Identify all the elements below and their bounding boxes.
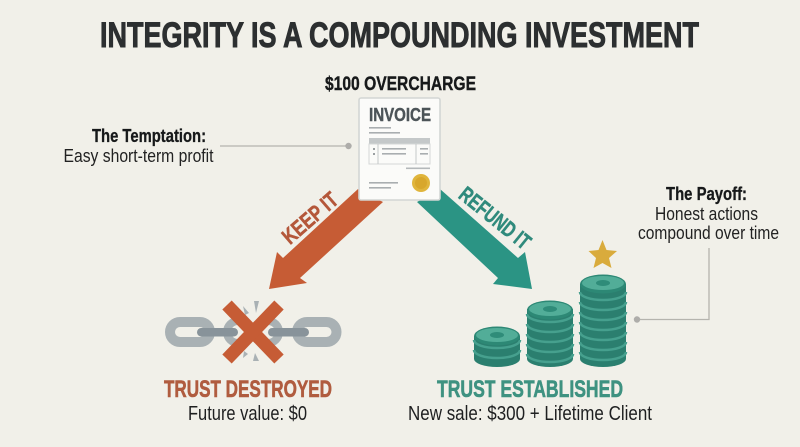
outcome: trust established [408,376,652,425]
coin stack small [474,326,520,367]
callout: the payoff: Honest actions [655,203,758,224]
icon: gold seal [412,174,430,192]
outcome: trust destroyed [164,376,332,425]
arrow: keep it [269,187,383,289]
icon: coin stacks [474,274,626,367]
arrow label: keep it: KEEP IT [277,187,343,249]
callout: the temptation: The Temptation: [92,126,206,146]
outcome: trust destroyed: Future value: $0 [188,402,307,425]
outcome: trust established: TRUST ESTABLISHED [437,376,623,403]
icon: red cross [227,305,279,359]
invoice document [359,98,440,200]
icon: gold star [588,240,617,268]
callout: the temptation: Easy short-term profit [64,145,214,166]
arrow label: refund it: REFUND IT [454,182,536,255]
coin stack medium [527,300,573,367]
callout: the payoff: The Payoff: [666,184,747,204]
invoice heading: $100 OVERCHARGE [325,73,476,95]
outcome: trust destroyed: TRUST DESTROYED [164,376,332,403]
icon: broken chain [170,301,336,361]
coin stack tall [580,274,626,367]
arrow: refund it [417,182,536,289]
callout: the payoff [634,184,779,323]
invoice document: INVOICE [369,105,431,125]
outcome: trust established: New sale: $300 + Lifetime Client [408,402,652,425]
callout: the temptation [64,126,352,166]
